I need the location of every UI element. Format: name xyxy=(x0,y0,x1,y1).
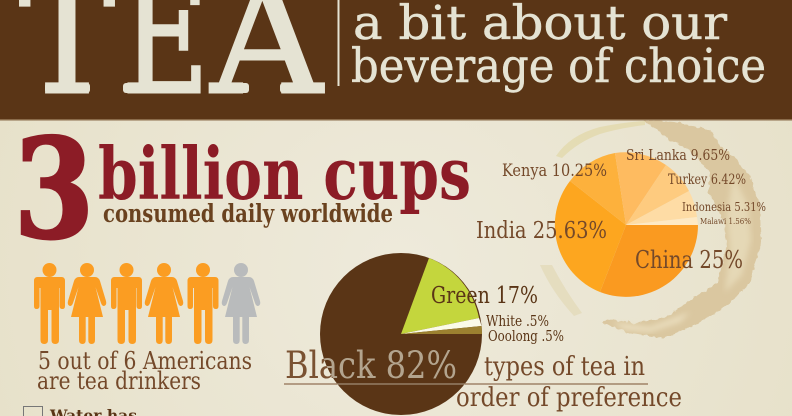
icons: people xyxy=(34,263,260,344)
types caption: types of tea in xyxy=(484,352,645,382)
big stat: 3 billion cups xyxy=(14,109,471,270)
producer labels: Sri Lanka 9.65% xyxy=(626,146,730,164)
producer labels: Kenya 10.25% xyxy=(502,161,607,181)
producer labels: China 25% xyxy=(635,246,743,274)
producer labels: Malawi 1.56% xyxy=(700,217,751,227)
people caption xyxy=(37,347,252,395)
header band xyxy=(0,0,792,119)
big stat: 3 billion cups: billion cups xyxy=(98,131,471,216)
tea producers pie chart xyxy=(555,152,698,297)
tea type labels xyxy=(431,283,564,345)
big stat: 3 billion cups: consumed daily worldwide xyxy=(103,199,393,228)
background paper xyxy=(0,118,792,416)
big stat: 3 billion cups: 3 xyxy=(14,109,94,270)
title xyxy=(19,0,766,129)
types caption: order of preference xyxy=(456,383,682,413)
types caption xyxy=(456,352,682,413)
tea types pie chart xyxy=(320,253,482,415)
producer labels: Indonesia 5.31% xyxy=(682,199,766,214)
people caption: are tea drinkers xyxy=(37,367,201,395)
tea type labels: Ooolong .5% xyxy=(488,327,564,345)
tea type labels: Green 17% xyxy=(431,283,538,309)
title: beverage of choice xyxy=(351,39,766,94)
producer labels xyxy=(476,146,766,274)
coffee stain ring xyxy=(540,120,761,338)
people caption: 5 out of 6 Americans xyxy=(38,347,252,375)
producer labels: Turkey 6.42% xyxy=(668,172,746,188)
Black 82% label: Black 82% xyxy=(285,344,457,387)
tea type labels: White .5% xyxy=(486,312,549,330)
producer labels: India 25.63% xyxy=(476,218,607,244)
